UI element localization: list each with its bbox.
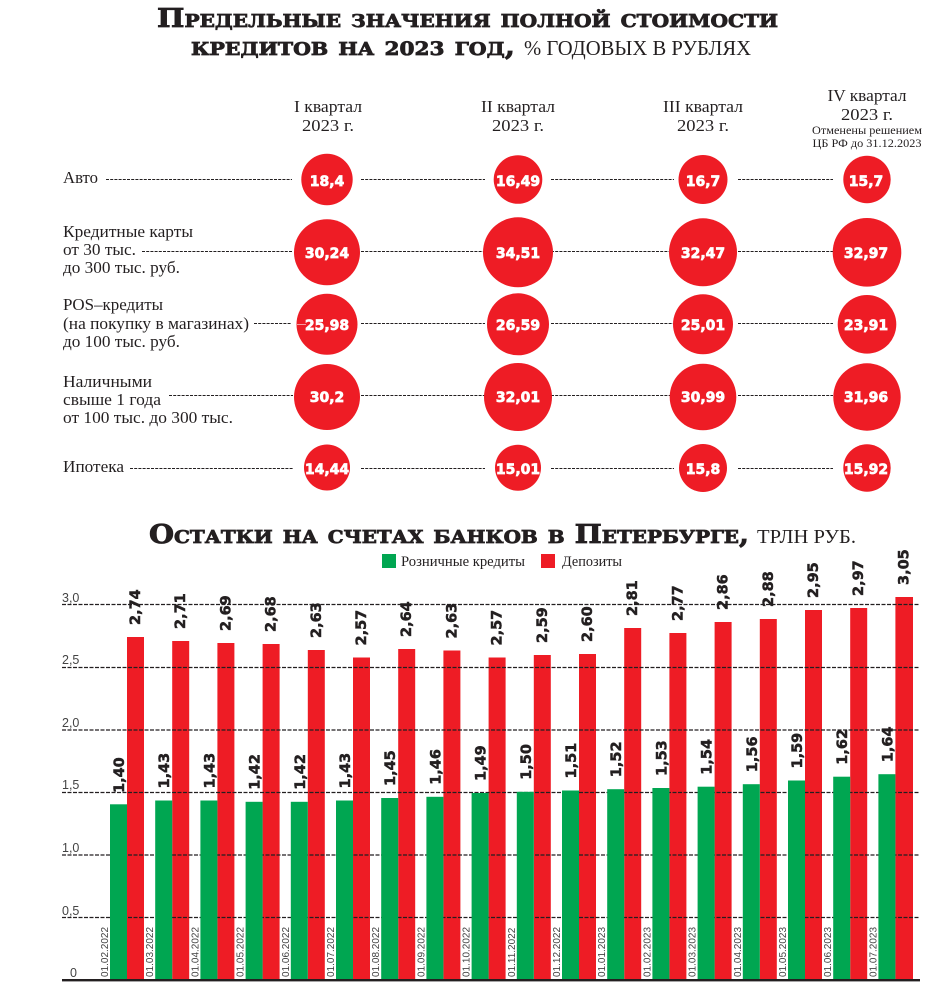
date labels: 01.02.2023 <box>642 927 653 977</box>
retail loan value labels: 1,49 <box>474 745 490 781</box>
quarter column headings: I квартал <box>294 97 363 116</box>
quarter column headings: 2023 г. <box>677 116 729 135</box>
title: bank balances: ТРЛН РУБ. <box>757 526 856 548</box>
date labels: 01.05.2022 <box>236 927 247 977</box>
row: cash loans <box>63 363 901 431</box>
legend: Розничные кредиты <box>401 554 525 570</box>
row: auto loans <box>63 154 891 205</box>
deposit value labels: 2,60 <box>580 606 596 642</box>
row: POS loans: 25,98 <box>305 318 349 334</box>
y axis labels: 2,5 <box>62 653 79 667</box>
deposit value labels: 2,69 <box>218 595 234 631</box>
row: auto loans: Авто <box>63 168 98 187</box>
row: cash loans: 30,99 <box>681 390 725 406</box>
row: cash loans: свыше 1 года <box>63 390 162 409</box>
retail loan value labels: 1,50 <box>519 744 535 780</box>
y axis labels: 0 <box>70 966 77 980</box>
deposit value labels: 2,74 <box>128 589 144 625</box>
retail loan value labels: 1,62 <box>835 729 851 765</box>
bars: deposits <box>127 597 913 980</box>
deposit value labels: 2,68 <box>264 596 280 632</box>
quarter column headings <box>294 86 923 150</box>
y axis labels: 1,5 <box>62 778 79 792</box>
row: cash loans: 31,96 <box>844 390 888 406</box>
row: mortgage: 14,44 <box>305 462 349 478</box>
date labels: 01.03.2022 <box>145 927 156 977</box>
row: POS loans <box>63 293 896 355</box>
retail loan value labels: 1,45 <box>383 750 399 786</box>
row: credit cards: от 30 тыс. <box>63 240 136 259</box>
retail loan value labels: 1,54 <box>700 739 716 775</box>
deposit value labels: 2,59 <box>535 607 551 643</box>
row: POS loans: (на покупку в магазинах) <box>63 314 249 333</box>
row: auto loans: 16,49 <box>496 174 540 190</box>
row: auto loans: 16,7 <box>686 174 720 190</box>
quarter column headings: IV квартал <box>828 86 907 105</box>
retail loan value labels: 1,43 <box>338 753 354 788</box>
y axis labels: 3,0 <box>62 591 79 605</box>
bars: retail loans <box>110 774 895 980</box>
deposit value labels: 2,88 <box>761 571 777 607</box>
row: cash loans: 32,01 <box>496 390 540 406</box>
row: credit cards: 30,24 <box>305 246 349 262</box>
date labels: 01.03.2023 <box>688 927 699 977</box>
row: auto loans: 18,4 <box>310 174 345 190</box>
row: POS loans: 26,59 <box>496 318 540 334</box>
title: credit cost limits: % ГОДОВЫХ В РУБЛЯХ <box>524 36 751 60</box>
row: cash loans: 30,2 <box>310 390 344 406</box>
row: cash loans: от 100 тыс. до 300 тыс. <box>63 408 233 427</box>
date labels: 01.11.2022 <box>507 927 518 977</box>
retail loan value labels: 1,52 <box>609 741 625 777</box>
row: cash loans: Наличными <box>63 372 152 391</box>
y axis labels: 0,5 <box>62 904 79 918</box>
retail loan value labels: 1,56 <box>745 736 761 772</box>
date labels: 01.06.2023 <box>823 927 834 977</box>
deposit value labels: 2,86 <box>716 574 732 610</box>
title: credit cost limits: кредитов на 2023 год, <box>191 32 515 62</box>
date labels: 01.04.2023 <box>733 927 744 977</box>
deposit value labels <box>128 549 912 646</box>
retail loan value labels: 1,53 <box>654 740 670 776</box>
retail loan value labels: 1,40 <box>112 757 128 793</box>
y axis labels: 2,0 <box>62 716 79 730</box>
date labels: 01.07.2023 <box>868 927 879 977</box>
quarter column headings: 2023 г. <box>302 116 354 135</box>
y axis labels <box>62 591 79 980</box>
date labels: 01.01.2023 <box>597 927 608 977</box>
row: POS loans: 23,91 <box>844 318 888 334</box>
legend <box>382 554 622 570</box>
quarter column headings: 2023 г. <box>492 116 544 135</box>
date labels: 01.12.2022 <box>552 927 563 977</box>
row: mortgage <box>63 444 891 492</box>
deposit value labels: 2,63 <box>309 602 325 638</box>
row: mortgage: Ипотека <box>63 457 125 476</box>
retail loan value labels: 1,43 <box>202 753 218 788</box>
row: credit cards: 32,47 <box>681 246 725 262</box>
deposit value labels: 2,97 <box>851 560 867 596</box>
title: credit cost limits: Предельные значения полной стоимости <box>157 4 778 34</box>
deposit value labels: 2,57 <box>490 610 506 646</box>
date labels: 01.10.2022 <box>462 927 473 977</box>
date labels: 01.04.2022 <box>190 927 201 977</box>
date labels: 01.06.2022 <box>281 927 292 977</box>
date labels: 01.02.2022 <box>100 927 111 977</box>
quarter column headings: ЦБ РФ до 31.12.2023 <box>812 138 922 150</box>
row: auto loans: 15,7 <box>849 174 883 190</box>
legend: Депозиты <box>562 554 622 570</box>
retail loan value labels: 1,42 <box>248 754 264 790</box>
retail loan value labels: 1,64 <box>880 726 896 762</box>
date labels <box>100 927 879 977</box>
quarter column headings: II квартал <box>481 97 556 116</box>
retail loan value labels <box>112 726 896 793</box>
title: bank balances: Остатки на счетах банков в Петербурге, <box>149 520 749 550</box>
title: credit cost limits <box>157 4 778 62</box>
retail loan value labels: 1,59 <box>790 733 806 768</box>
quarter column headings: 2023 г. <box>841 105 893 124</box>
row: credit cards: до 300 тыс. руб. <box>63 258 180 277</box>
retail loan value labels: 1,51 <box>564 743 580 778</box>
date labels: 01.09.2022 <box>416 927 427 977</box>
deposit value labels: 2,64 <box>399 601 415 637</box>
deposit value labels: 2,71 <box>173 593 189 629</box>
row: POS loans: 25,01 <box>681 318 725 334</box>
retail loan value labels: 1,42 <box>293 754 309 790</box>
quarter column headings: III квартал <box>663 97 744 116</box>
deposit value labels: 2,57 <box>354 610 370 646</box>
date labels: 01.08.2022 <box>371 927 382 977</box>
y axis labels: 1,0 <box>62 841 79 855</box>
chart baseline <box>62 979 920 981</box>
quarter column headings: Отменены решением <box>812 125 923 137</box>
deposit value labels: 3,05 <box>896 549 912 585</box>
row: mortgage: 15,92 <box>844 462 888 478</box>
row: mortgage: 15,8 <box>686 462 720 478</box>
row: POS loans: POS–кредиты <box>63 295 163 314</box>
deposit value labels: 2,95 <box>806 562 822 598</box>
retail loan value labels: 1,46 <box>428 749 444 785</box>
row: credit cards <box>63 217 901 287</box>
row: credit cards: 34,51 <box>496 246 540 262</box>
deposit value labels: 2,63 <box>444 603 460 638</box>
retail loan value labels: 1,43 <box>157 753 173 788</box>
date labels: 01.05.2023 <box>778 927 789 977</box>
deposit value labels: 2,81 <box>625 580 641 616</box>
deposit value labels: 2,77 <box>670 585 686 621</box>
row: credit cards: Кредитные карты <box>63 222 193 241</box>
date labels: 01.07.2022 <box>326 927 337 977</box>
row: mortgage: 15,01 <box>496 462 540 478</box>
row: POS loans: до 100 тыс. руб. <box>63 332 180 351</box>
row: credit cards: 32,97 <box>844 246 888 262</box>
